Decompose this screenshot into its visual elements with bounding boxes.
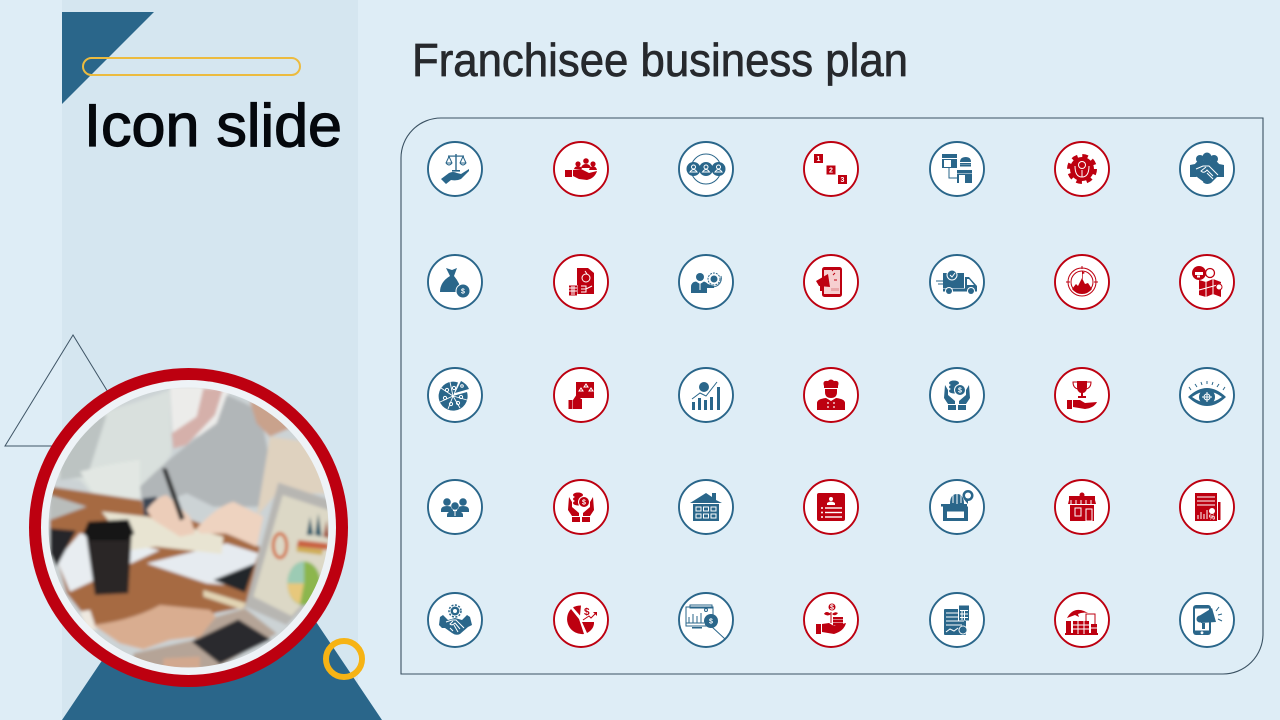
icon: money bag: $ (461, 288, 465, 296)
icon: storefront (1055, 480, 1109, 534)
icon: front desk with location pin (930, 480, 984, 534)
icon: partnership handshake with gear (428, 593, 482, 647)
icon: financial report (1180, 480, 1234, 534)
icon: numbered steps: 2 (829, 168, 833, 174)
icon: factory with dolphin logo (1055, 593, 1109, 647)
icon: numbered steps: 1 (817, 156, 821, 163)
icon: vision eye (1180, 368, 1234, 422)
icon: hand with money plant (804, 593, 858, 647)
icon: hands with coins (blue) (930, 368, 984, 422)
photo medallion (29, 368, 348, 687)
icon: three users in circle (679, 142, 733, 196)
outline triangle (5, 335, 141, 446)
icon: pie chart with growth: $ (584, 607, 590, 618)
icon: hands with coins (red): $ (582, 500, 586, 506)
icon: financial report: % (1209, 514, 1216, 522)
icon: businessman with gear (679, 255, 733, 309)
icon: store location on map (1180, 255, 1234, 309)
icon: hands with coins (blue): $ (958, 388, 962, 394)
icon: plan document with calculator (554, 255, 608, 309)
icon: pizza (428, 368, 482, 422)
photo: team at desk with laptop (43, 383, 337, 673)
icon: phone with megaphone (blue) (1180, 593, 1234, 647)
icon: franchise stores and burger (930, 142, 984, 196)
heading: Franchisee business plan (412, 34, 908, 86)
icon: delivery truck (930, 255, 984, 309)
icon: thumbs up with rating (554, 368, 608, 422)
yellow ring (326, 641, 362, 677)
icon: phone with megaphone (804, 255, 858, 309)
icon: numbered steps (804, 142, 858, 196)
corner triangle (62, 12, 154, 104)
icon: handshake with team (1180, 142, 1234, 196)
icon: hands with coins (red) (554, 480, 608, 534)
left side band (62, 0, 358, 720)
icon: gear with person (1055, 142, 1109, 196)
icon: pie chart with growth (554, 593, 608, 647)
icon: hand holding people (554, 142, 608, 196)
icon: money bag (428, 255, 482, 309)
icon: compass with mountain (1055, 255, 1109, 309)
icon: monitor with magnifier: $ (709, 618, 713, 626)
icon: hand with money plant: $ (830, 604, 834, 612)
icon: chef (804, 368, 858, 422)
icon grid (428, 142, 1234, 647)
slide title: Icon slide (84, 92, 342, 159)
icon panel frame (401, 118, 1263, 674)
icon: scales on hand (428, 142, 482, 196)
icon: profile list (804, 480, 858, 534)
icon: document and calculator (930, 593, 984, 647)
icon: team of three (428, 480, 482, 534)
yellow pill outline (83, 58, 300, 75)
icon: monitor with magnifier (679, 593, 733, 647)
bottom blue triangle (62, 482, 382, 720)
icon: growth chart with person (679, 368, 733, 422)
icon: house (679, 480, 733, 534)
icon: numbered steps: 3 (841, 177, 845, 184)
icon: trophy on hand (1055, 368, 1109, 422)
